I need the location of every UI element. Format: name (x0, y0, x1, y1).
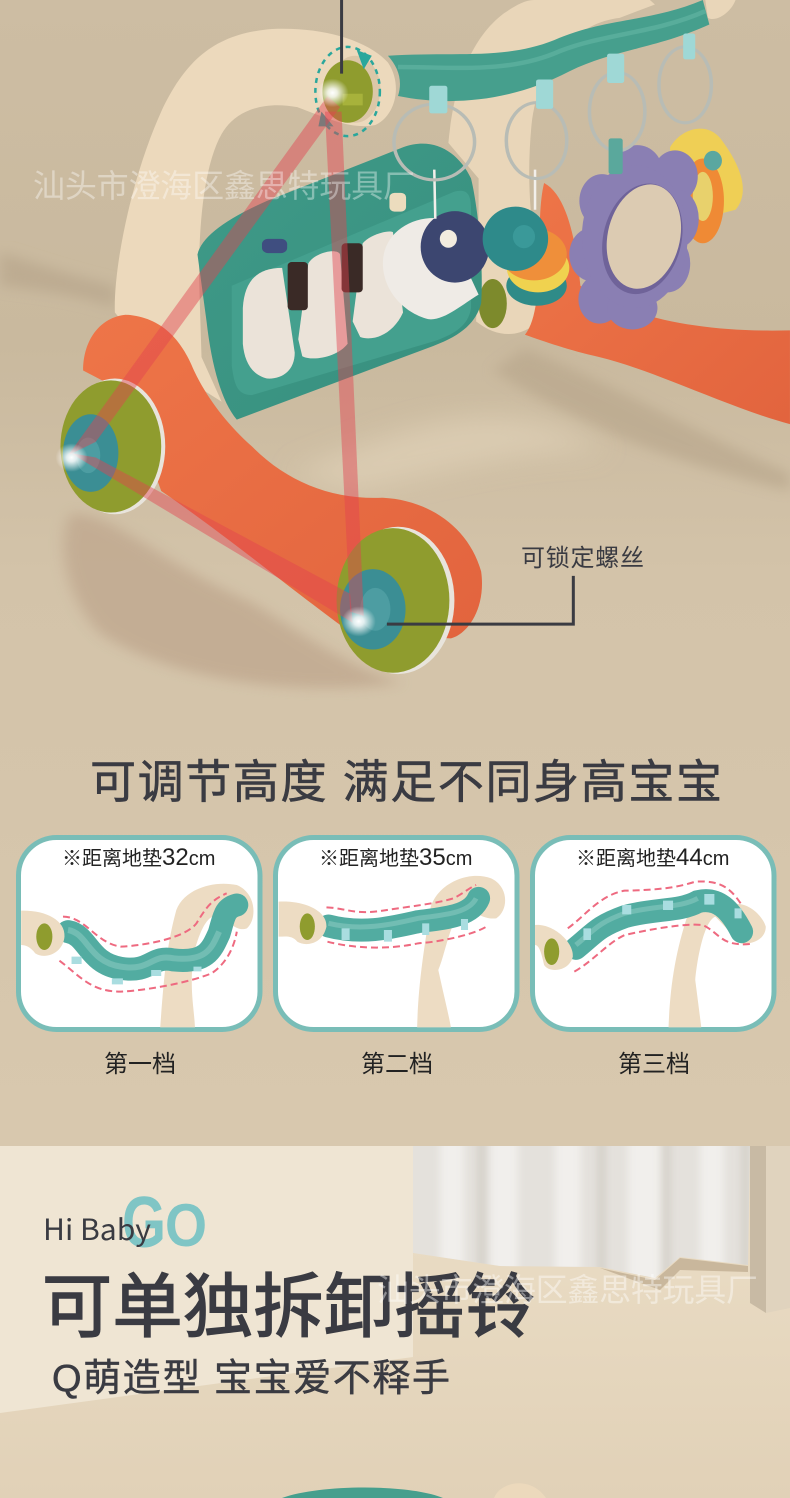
card height label: ※距离地垫32cm (62, 844, 215, 871)
card: level two (276, 838, 517, 1030)
card frame (276, 838, 517, 1030)
front wheel left (60, 379, 165, 514)
subheading: Q萌造型 宝宝爱不释手 (52, 1358, 450, 1400)
panel light (389, 193, 406, 212)
leader line to screw (387, 576, 573, 624)
lower section: room background (0, 1120, 790, 1498)
card illustration (535, 881, 766, 1027)
leader line to top hub (340, 0, 343, 74)
toy: white rocket (383, 211, 489, 319)
watermark top: 汕头市澄海区鑫思特玩具厂 (33, 168, 415, 204)
logo Hi Baby: Hi Baby (43, 1207, 151, 1249)
card frame (532, 838, 774, 1030)
logo GO (122, 1183, 207, 1263)
level one label: 第一档 (104, 1051, 176, 1078)
laser triangle beams (55, 79, 376, 637)
cropped rattle top teal (282, 1488, 443, 1498)
grey rings and clips (394, 33, 711, 180)
floor shadows (0, 252, 790, 688)
card height label: ※距离地垫44cm (576, 844, 729, 871)
back arch (448, 0, 655, 334)
callout label: 可锁定螺丝 (521, 545, 644, 572)
yellow and orange rattle (670, 129, 743, 243)
front arch (115, 29, 396, 402)
card height label: ※距离地垫35cm (319, 844, 472, 871)
card illustration (21, 884, 253, 1027)
card illustration (279, 876, 505, 1027)
level three label: 第三档 (618, 1051, 690, 1078)
front orange base (83, 315, 482, 638)
main heading: 可单独拆卸摇铃 (42, 1268, 535, 1346)
watermark lower: 汕头市澄海区鑫思特玩具厂 (377, 1272, 758, 1308)
piano keys (243, 232, 403, 379)
product photo: baby walker with laser triangle (0, 0, 790, 688)
side recess (479, 279, 507, 328)
section heading: 可调节高度 满足不同身高宝宝 (90, 756, 722, 808)
level two label: 第二档 (361, 1051, 433, 1078)
hanging strings (434, 170, 535, 219)
logo GO: O (165, 1192, 207, 1259)
logo GO: G (122, 1183, 166, 1263)
toy: ball rattle (483, 207, 569, 306)
front wheel right (337, 527, 454, 674)
black keys (288, 243, 363, 310)
teal arm bar (388, 0, 709, 101)
background: upper section (0, 0, 790, 1146)
right orange base (525, 183, 790, 424)
card: level three (532, 838, 774, 1030)
card frame (18, 838, 260, 1030)
curtain folds (413, 1146, 750, 1278)
flower mirror toy (569, 145, 699, 329)
card: level one (18, 838, 260, 1030)
panel button (262, 239, 287, 253)
adjustment hub with rotation arrows (315, 47, 380, 136)
cropped rattle top cream (494, 1483, 546, 1498)
music panel (197, 144, 482, 420)
